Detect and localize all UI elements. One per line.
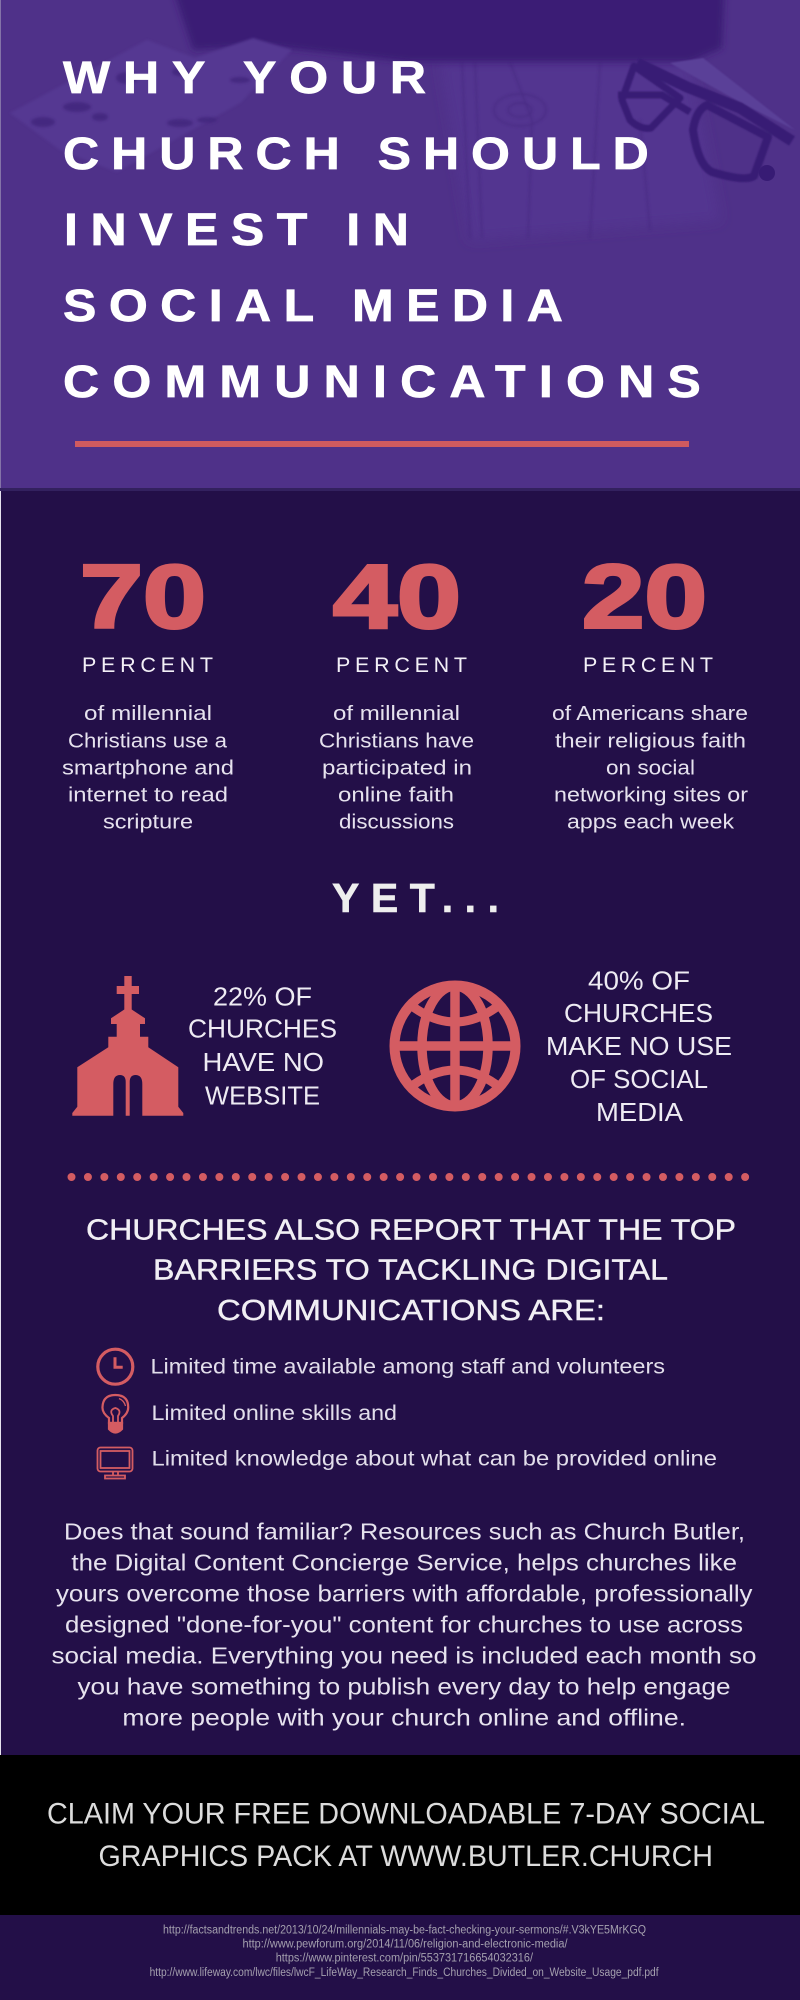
stat: 40 percent: 40 xyxy=(333,548,461,648)
icon: clock xyxy=(98,1349,133,1384)
title: WHY YOUR xyxy=(63,53,426,103)
panel: hero header xyxy=(0,0,800,488)
title: SOCIAL MEDIA xyxy=(63,281,563,331)
source links: http://www.lifeway.com/lwc/files/lwcF_LifeWay_Research_Finds_Churches_Divided_on_Website_Usage_pdf.pdf xyxy=(150,1967,659,1979)
icon: light bulb xyxy=(102,1395,128,1432)
text: 22 percent no website: HAVE NO xyxy=(202,1049,324,1077)
paragraph: church butler: more people with your church online and offline. xyxy=(122,1705,686,1731)
source links: http://factsandtrends.net/2013/10/24/millennials-may-be-fact-checking-your-sermons/#.V3kYE5MrKGQ xyxy=(163,1924,646,1936)
text: 22 percent no website: 22% OF xyxy=(213,983,312,1011)
text: 40 percent no social media xyxy=(546,967,732,1127)
stat: 20 percent: on social xyxy=(606,756,695,779)
text: 22 percent no website xyxy=(188,983,337,1110)
list item: limited skills: Limited online skills and xyxy=(152,1402,397,1425)
stat: 20 percent: networking sites or xyxy=(554,784,748,806)
stat: 20 percent: PERCENT xyxy=(583,653,713,677)
stat: 20 percent: of Americans share xyxy=(552,702,748,725)
stat: 20 percent: 20 xyxy=(582,548,707,648)
text: 22 percent no website: WEBSITE xyxy=(205,1082,320,1110)
call to action text: CLAIM YOUR FREE DOWNLOADABLE 7-DAY SOCIAL xyxy=(47,1797,765,1830)
title: INVEST IN xyxy=(64,205,409,255)
panel: call to action xyxy=(0,1755,800,1915)
title: COMMUNICATIONS xyxy=(63,357,701,407)
stat: 40 percent xyxy=(319,548,474,833)
text: 40 percent no social media: MEDIA xyxy=(596,1099,683,1127)
paragraph: church butler xyxy=(52,1518,756,1731)
panel: church gaps xyxy=(72,967,732,1127)
text: 40 percent no social media: OF SOCIAL xyxy=(570,1066,708,1094)
panel: barrier list xyxy=(98,1349,717,1478)
left edge line xyxy=(0,491,1,1755)
call to action text: GRAPHICS PACK AT WWW.BUTLER.CHURCH xyxy=(98,1840,713,1873)
title underline xyxy=(75,441,689,447)
stat: 70 percent: of millennial xyxy=(84,702,212,725)
paragraph: church butler: the Digital Content Concierge Service, helps churches like xyxy=(71,1550,737,1576)
text: 40 percent no social media: CHURCHES xyxy=(564,1000,713,1028)
stat: 70 percent: scripture xyxy=(103,810,193,833)
stat: 40 percent: of millennial xyxy=(333,702,460,725)
stat: 40 percent: online faith xyxy=(338,784,454,806)
title xyxy=(63,53,701,407)
paragraph: church butler: you have something to publish every day to help engage xyxy=(78,1674,730,1700)
stat: 40 percent: participated in xyxy=(322,756,472,779)
panel: statistics xyxy=(62,548,748,833)
source links: http://www.pewforum.org/2014/11/06/religion-and-electronic-media/ xyxy=(242,1939,568,1951)
paragraph: church butler: yours overcome those barriers with affordable, professionally xyxy=(56,1581,753,1607)
stat: 70 percent: PERCENT xyxy=(82,653,213,677)
list item: limited knowledge: Limited knowledge about what can be provided online xyxy=(152,1448,717,1471)
icon: globe xyxy=(394,986,516,1106)
text: 22 percent no website: CHURCHES xyxy=(188,1016,337,1044)
paragraph: church butler: designed "done-for-you" content for churches to use across xyxy=(65,1612,743,1638)
source links: https://www.pinterest.com/pin/553731716654032316/ xyxy=(276,1953,534,1965)
text: 40 percent no social media: MAKE NO USE xyxy=(546,1033,732,1061)
heading: top barriers xyxy=(86,1214,736,1327)
heading: top barriers: CHURCHES ALSO REPORT THAT THE TOP xyxy=(86,1214,736,1246)
paragraph: church butler: social media. Everything you need is included each month so xyxy=(52,1642,756,1668)
stat: 70 percent xyxy=(62,548,234,833)
source links xyxy=(150,1924,659,1979)
glasses arm tip xyxy=(759,165,775,181)
icon: church xyxy=(72,976,183,1116)
hero photo: desk with map and glasses xyxy=(10,0,795,240)
icon: monitor xyxy=(98,1448,132,1478)
list item: limited time: Limited time available among staff and volunteers xyxy=(150,1356,665,1379)
call to action text xyxy=(47,1797,765,1873)
stat: 70 percent: Christians use a xyxy=(68,729,228,752)
heading: top barriers: COMMUNICATIONS ARE: xyxy=(217,1295,605,1327)
paragraph: church butler: Does that sound familiar? Resources such as Church Butler, xyxy=(64,1518,745,1544)
stat: 70 percent: smartphone and xyxy=(62,756,234,779)
text: 40 percent no social media: 40% OF xyxy=(588,967,690,995)
stat: 20 percent: apps each week xyxy=(567,810,735,833)
stat: 40 percent: discussions xyxy=(339,810,454,833)
heading: top barriers: BARRIERS TO TACKLING DIGITAL xyxy=(153,1255,668,1287)
stat: 20 percent: their religious faith xyxy=(555,729,746,752)
stat: 20 percent xyxy=(552,548,748,833)
stat: 70 percent: internet to read xyxy=(68,784,228,806)
stat: 40 percent: Christians have xyxy=(319,729,474,752)
title: CHURCH SHOULD xyxy=(63,129,649,179)
stat: 40 percent: PERCENT xyxy=(336,653,467,677)
heading: yet: YET... xyxy=(332,875,499,921)
stat: 70 percent: 70 xyxy=(80,548,206,648)
